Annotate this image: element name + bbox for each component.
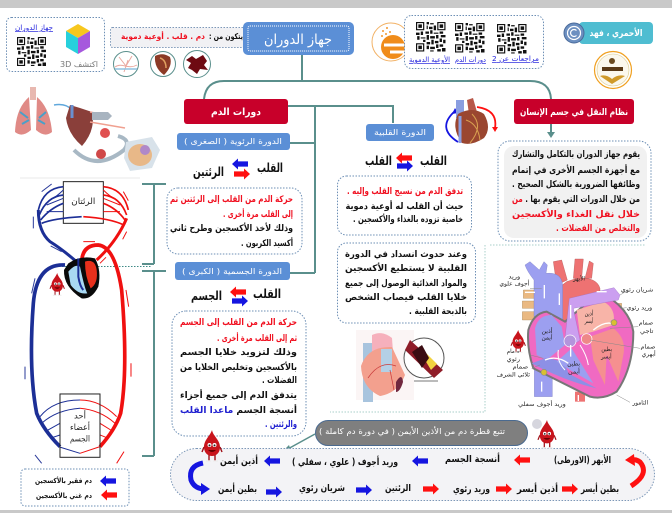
great vessels bbox=[522, 259, 625, 402]
pulmonary route: القلب bbox=[257, 160, 283, 175]
link: references: مراجعات عن 2 bbox=[492, 55, 539, 63]
QR: references bbox=[497, 24, 526, 54]
mascot: drop by heart diagram bbox=[511, 330, 525, 352]
body box: أحد bbox=[74, 409, 86, 420]
body box bbox=[60, 394, 100, 457]
composition note: دم . قلب . أوعية دموية bbox=[121, 31, 205, 41]
QR code bbox=[17, 37, 46, 66]
coronary route: القلب bbox=[365, 153, 392, 168]
pulmonary route: الرئتين bbox=[193, 164, 224, 179]
bottom row steps: الرئتين bbox=[385, 483, 411, 494]
panel: coronary text: حيث أن القلب له أوعية دموية bbox=[346, 200, 464, 212]
icon: blood vessels bbox=[114, 52, 138, 76]
title: جهاز الدوران bbox=[264, 32, 332, 48]
anatomy labels: الأبهر bbox=[572, 274, 585, 282]
title bbox=[243, 22, 354, 55]
anatomy labels: أيمن bbox=[541, 334, 553, 342]
blue return arc bbox=[190, 463, 210, 495]
lungs box bbox=[38, 182, 128, 263]
panel: intro text: من خلال الدورات التي يقوم بها . من bbox=[512, 195, 640, 205]
mascot: drop at right atrium bbox=[202, 430, 222, 461]
icon: school logo bbox=[594, 52, 632, 88]
top row steps: الأبهر (الاورطى) bbox=[554, 454, 611, 466]
bottom row steps bbox=[218, 482, 619, 498]
top row steps: أذين أيمن bbox=[220, 454, 258, 467]
heading: coronary circuit bbox=[366, 124, 434, 141]
anatomy labels: صمام bbox=[639, 321, 653, 327]
QR: vessels bbox=[416, 22, 446, 52]
panel: references QR box bbox=[404, 16, 544, 68]
anatomy labels: أجوف علوي bbox=[499, 279, 530, 287]
panel: follow a drop prompt: تتبع قطرة دم من الأذين الأيمن ( في دورة دم كاملة ) bbox=[319, 426, 505, 436]
label: explore 3D: اكتشف 3D bbox=[60, 60, 98, 69]
panel: pulmonary text: حركة الدم من القلب إلى الرئتين ثم bbox=[170, 195, 293, 205]
image: lungs heart and cell bbox=[15, 87, 160, 171]
heading: blood cycles bbox=[184, 99, 288, 124]
anatomy labels: وريد bbox=[508, 275, 520, 281]
panel: coronary text bbox=[338, 176, 472, 235]
anatomy labels bbox=[497, 274, 656, 408]
panel: systemic text: حركة الدم من القلب إلى الجسم bbox=[180, 318, 297, 328]
bottom row steps: بطين أيسر bbox=[580, 482, 619, 495]
top row steps: أنسجة الجسم bbox=[445, 452, 500, 465]
composition note bbox=[110, 28, 244, 48]
anatomy labels: أذين bbox=[541, 327, 553, 335]
anatomy labels: وريد رئوي bbox=[626, 305, 652, 311]
panel: blockage text bbox=[338, 243, 476, 323]
legend: دم فقير بالأكسجين bbox=[35, 476, 92, 485]
leader lines bbox=[530, 288, 640, 402]
mascot: drop holding ball bbox=[532, 419, 556, 448]
anatomy labels: بطين bbox=[567, 361, 580, 367]
top row steps bbox=[220, 452, 611, 468]
anatomy labels: أيسر bbox=[584, 317, 594, 325]
bottom row steps: وريد رئوي bbox=[453, 484, 490, 495]
heart bbox=[64, 257, 99, 299]
icon: heart with circulation arcs bbox=[446, 98, 498, 144]
anatomy labels: صمام bbox=[507, 349, 520, 355]
connector lines bbox=[20, 55, 646, 456]
author badge: الأحمري ، فهد bbox=[590, 27, 642, 39]
arrow: prompt to start bbox=[281, 434, 315, 453]
anatomy labels: صمام bbox=[640, 345, 656, 351]
panel: blood path flow bbox=[170, 448, 654, 500]
panel: systemic text: بالأكسجين وتخليص الخلايا من bbox=[180, 361, 297, 373]
panel: systemic text: يتدفق الدم إلى جميع أجزاء bbox=[180, 389, 297, 401]
panel: systemic text: ثم إلى القلب مرة أخرى . bbox=[217, 332, 297, 344]
panel: blockage text: وعند حدوث انسداد في الدورة bbox=[345, 250, 467, 260]
anatomy labels: تاجي bbox=[640, 329, 654, 335]
heading: pulmonary circuit: الدورة الرئوية ( الصغرى ) bbox=[184, 137, 282, 146]
panel: systemic text: أنسجة الجسم ماعدا القلب bbox=[180, 404, 297, 416]
anatomy labels: رئوي bbox=[507, 357, 520, 363]
panel: intro text: والتخلص من الفضلات . bbox=[556, 224, 640, 234]
panel: systemic text: الفضلات . bbox=[262, 376, 297, 386]
bottom row steps: بطين أيمن bbox=[218, 482, 257, 495]
red return arc bbox=[625, 454, 643, 486]
anatomy labels: التامور bbox=[631, 400, 649, 406]
body box: أعضاء bbox=[70, 421, 90, 432]
anatomy labels: بطين bbox=[601, 347, 612, 353]
heading: transport system: نظام النقل في جسم الإنسان bbox=[520, 107, 628, 118]
legend bbox=[21, 469, 129, 506]
panel: pulmonary text: إلى القلب مرة أخرى . bbox=[223, 208, 293, 220]
heading: pulmonary circuit bbox=[177, 133, 290, 150]
panel: blockage text: والمواد الغذائية الوصول إلى جميع bbox=[345, 279, 467, 289]
mascot: drop by heart bbox=[50, 273, 64, 295]
panel: 3D explore box bbox=[6, 18, 104, 72]
panel: intro text bbox=[498, 141, 651, 241]
chambers bbox=[525, 285, 624, 401]
legend: دم غني بالأكسجين bbox=[36, 491, 92, 500]
heading: systemic circuit bbox=[175, 262, 290, 280]
anatomy labels: أبهري bbox=[642, 350, 656, 358]
heart wall bbox=[528, 292, 633, 398]
flow arrows bbox=[25, 184, 131, 463]
panel: intro text: خلال نقل الغذاء والأكسجين bbox=[512, 208, 640, 220]
systemic route: القلب bbox=[253, 286, 281, 301]
diagram: double circulation bbox=[25, 182, 131, 463]
panel: blockage text: القلبية لا يستطيع الأكسجين bbox=[345, 262, 467, 274]
anatomy labels: وريد أجوف سفلي bbox=[518, 400, 566, 408]
link: vessels: الأوعية الدموية bbox=[409, 55, 450, 64]
bottom row steps: شريان رئوي bbox=[299, 483, 345, 494]
author badge bbox=[564, 22, 653, 44]
panel: coronary text: تدفق الدم من نسيج القلب وإليه . bbox=[347, 187, 463, 197]
systemic route: الجسم bbox=[191, 288, 222, 303]
panel: coronary text: خاصية تزوده بالغذاء والأكسجين . bbox=[353, 213, 463, 225]
panel: systemic text: والرئتين . bbox=[265, 420, 297, 430]
systemic vessels bbox=[31, 245, 125, 453]
icon: blood bbox=[184, 50, 210, 78]
panel: follow a drop prompt bbox=[316, 420, 528, 446]
systemic route bbox=[191, 286, 281, 306]
panel: blockage text: خلايا القلب فيصاب الشخص bbox=[345, 293, 467, 303]
anatomy labels: أذين bbox=[585, 309, 594, 317]
anatomy labels: أيسر bbox=[600, 353, 612, 361]
panel: pulmonary text: أكسيد الكربون . bbox=[241, 237, 293, 249]
pulmonary route bbox=[193, 158, 283, 180]
link: cycles: دورات الدم bbox=[455, 56, 486, 64]
heading: coronary circuit: الدورة القلبية bbox=[374, 128, 426, 137]
coronary route bbox=[365, 152, 447, 172]
link: circulatory system: جهاز الدوران bbox=[15, 24, 53, 32]
panel: systemic text: وذلك لتزويد خلايا الجسم bbox=[180, 348, 297, 358]
panel: pulmonary text bbox=[167, 188, 302, 254]
coronary route: القلب bbox=[420, 153, 447, 168]
anatomy labels: ثلاثي الشرف bbox=[497, 372, 530, 378]
anatomy labels: شريان رئوي bbox=[621, 288, 653, 294]
heading: transport system bbox=[514, 99, 634, 124]
panel: pulmonary text: وذلك لأخذ الأكسجين وطرح ثاني bbox=[170, 222, 293, 234]
icon: lessons logo orange bbox=[372, 23, 410, 61]
heading: systemic circuit: الدورة الجسمية ( الكبرى ) bbox=[182, 267, 282, 276]
heading: blood cycles: دورات الدم bbox=[211, 107, 261, 118]
panel: intro text: مع أجهزة الجسم الأخرى في إتمام bbox=[512, 164, 640, 176]
image: blocked coronary artery bbox=[356, 330, 444, 402]
icon: heart bbox=[150, 52, 176, 76]
bottom row steps: أذين أيسر bbox=[516, 482, 558, 495]
lungs box: الرئتان bbox=[71, 197, 95, 207]
panel: blockage text: بالذبحة القلبية . bbox=[409, 307, 467, 317]
anatomy labels: أيمن bbox=[568, 368, 580, 376]
panel: intro text: وظائفها الضرورية بالشكل الصحيح . bbox=[512, 180, 640, 190]
body box: الجسم bbox=[70, 434, 90, 445]
diagram: heart anatomy bbox=[497, 259, 656, 408]
anatomy labels: صمام bbox=[512, 365, 528, 371]
QR: blood cycles bbox=[455, 23, 484, 52]
icon: 3D cube bbox=[66, 24, 90, 54]
composition note: يتكون من : bbox=[209, 32, 243, 41]
top row steps: وريد أجوف ( علوي ، سفلي ) bbox=[292, 455, 398, 468]
panel: systemic text bbox=[172, 311, 306, 436]
